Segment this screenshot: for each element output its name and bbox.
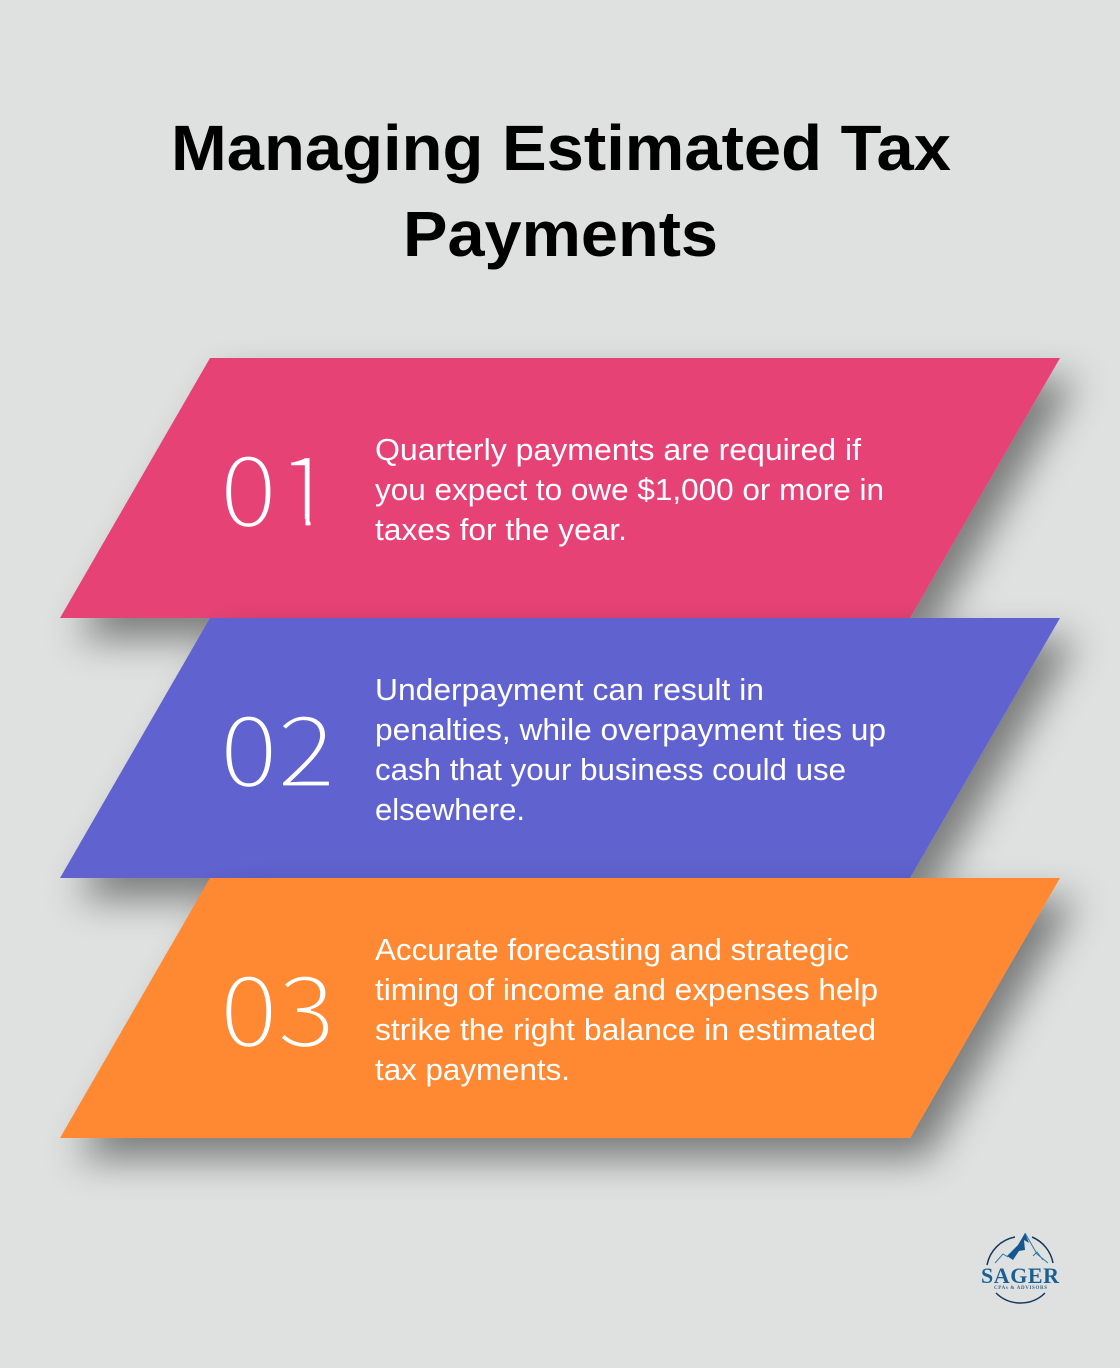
panel: step 02 — [60, 618, 1060, 878]
text: step 03: tax payments. — [375, 1052, 570, 1087]
blue parallelogram — [60, 618, 1060, 878]
text: step 02: Underpayment can result in — [375, 672, 764, 707]
text: step 01 — [375, 432, 884, 547]
text: step 02 — [375, 672, 886, 827]
title: Managing Estimated Tax — [171, 112, 951, 184]
text: step 01: taxes for the year. — [375, 512, 627, 547]
icon: ring arcs — [987, 1237, 1053, 1303]
number 03: 03 — [220, 933, 335, 1074]
text: step 02: cash that your business could use — [375, 752, 846, 787]
text: step 03: Accurate forecasting and strategic — [375, 932, 849, 967]
text: step 02: elsewhere. — [375, 792, 525, 827]
text: step 03: timing of income and expenses help — [375, 972, 878, 1007]
orange parallelogram — [60, 878, 1060, 1138]
text: step 03 — [375, 932, 878, 1087]
text: step 02: penalties, while overpayment ties up — [375, 712, 886, 747]
logo: Sager CPAs & Advisors — [981, 1233, 1060, 1303]
wordmark: SAGER — [981, 1263, 1060, 1288]
panel: step 01 — [60, 358, 1060, 618]
number 02: 02 — [220, 673, 335, 814]
text: step 01: Quarterly payments are required if — [375, 432, 861, 467]
text: step 01: you expect to owe $1,000 or more in — [375, 472, 884, 507]
title: Payments — [403, 198, 718, 270]
text: step 03: strike the right balance in estimated — [375, 1012, 876, 1047]
pink parallelogram — [60, 358, 1060, 618]
title — [171, 112, 951, 270]
number 01: 01 — [220, 413, 334, 554]
tagline: CPAs & ADVISORS — [994, 1286, 1047, 1291]
icon: mountains — [995, 1233, 1048, 1263]
panel: step 03 — [60, 878, 1060, 1138]
